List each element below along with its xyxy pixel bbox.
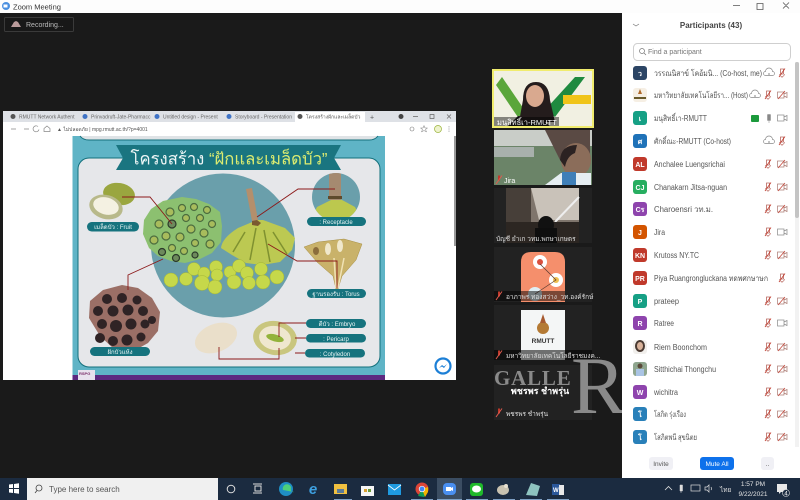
video tile: active speaker: มนุสิทธิ์เา-RMUTT xyxy=(497,117,557,127)
browser tab bar: Prinvadruft-Jate-Pharmacc xyxy=(91,114,151,120)
participant row: prateep xyxy=(654,297,680,306)
participant row: KN xyxy=(635,253,645,260)
participants panel xyxy=(622,13,800,478)
running app underlines xyxy=(334,498,569,500)
browser tab bar xyxy=(3,111,456,122)
participant row: Chanakarn Jitsa-nguan xyxy=(654,183,727,192)
label: embryo xyxy=(306,319,366,328)
participant search box: Find a participant xyxy=(648,49,702,56)
start button xyxy=(9,483,19,494)
participant row: Sitthichai Thongchu xyxy=(654,365,716,374)
cortana and task view xyxy=(227,484,262,493)
mute all button: Mute All xyxy=(705,461,729,468)
participant row xyxy=(633,385,787,399)
video tile: third participant xyxy=(494,188,592,243)
participant row: มนุสิทธิ์เา-RMUTT xyxy=(654,112,707,123)
participants heading xyxy=(633,21,742,30)
white seed xyxy=(190,317,242,359)
participant row: โ xyxy=(637,433,642,442)
fruit seed image xyxy=(86,180,137,223)
participant row: Ratree xyxy=(654,319,674,328)
video tile: named participant: พชรพร ชำพรุ่น xyxy=(506,410,549,418)
dried lotus pod xyxy=(89,285,160,352)
named participant caption: พชรพร ชำพรุ่น xyxy=(511,386,570,397)
clock: 9/22/2021 xyxy=(739,491,768,498)
participant row xyxy=(633,88,787,102)
participant row: wichitra xyxy=(653,388,678,397)
participant row: Anchalee Luengsrichai xyxy=(654,160,725,169)
label: dried pod xyxy=(90,347,150,356)
receptacle image xyxy=(312,173,360,217)
label: dried pod: ฝักบัวแห้ง xyxy=(107,349,133,356)
participant row: โสภิต รุ่งเรือง xyxy=(654,409,686,419)
callout lines xyxy=(122,189,337,359)
more button xyxy=(761,457,774,470)
recording badge xyxy=(4,18,74,32)
participant row xyxy=(633,362,787,376)
clock: 1:57 PM xyxy=(741,481,765,488)
pinned app icons xyxy=(279,478,564,500)
participant row xyxy=(633,430,787,444)
video tile: avatar graphic: อาภาพร ทองสว่าง_วท.องค์รักษ์ xyxy=(506,293,594,301)
video tile: RMUTT logo xyxy=(494,305,600,360)
green lotus seeds xyxy=(164,260,284,294)
participant row xyxy=(633,111,787,125)
taskbar search box: Type here to search xyxy=(49,485,120,494)
participant row: ว xyxy=(638,71,642,78)
participant row: มหาวิทยาลัยเทคโนโลยีรา... (Host) xyxy=(654,90,748,100)
browser tab bar: Untitled design - Present xyxy=(163,114,218,120)
clock xyxy=(739,481,768,498)
poster footer bar xyxy=(72,370,385,380)
label: cotyledon xyxy=(305,349,365,358)
participant row: PR xyxy=(635,276,645,283)
notification icon xyxy=(777,484,790,498)
taskbar search box xyxy=(27,478,218,500)
video tile: third participant: บัญชี ยำเก วทม.พกษาเกษตร xyxy=(496,235,576,243)
central teal circle xyxy=(151,174,295,318)
participant row: ศักดิ์ณะ-RMUTT (Co-host) xyxy=(654,135,731,146)
recording badge: Recording... xyxy=(26,22,64,29)
label: embryo: ดีบัว : Embryo xyxy=(319,320,356,328)
participant row: CJ xyxy=(636,185,645,192)
label: fruit: เมล็ดบัว : Fruit xyxy=(94,222,132,231)
browser scrollbar xyxy=(454,136,456,246)
participant row: Piya Ruangrongluckana ทดพศกษาษก xyxy=(654,274,768,283)
participant row xyxy=(633,225,787,239)
poster title ribbon xyxy=(116,145,341,170)
browser tab bar: RMUTT Network Authent xyxy=(19,114,75,120)
participant row: เ xyxy=(639,116,642,123)
participant row: Krutoss NY.TC xyxy=(654,251,699,260)
system tray xyxy=(665,485,732,494)
participant row xyxy=(633,271,785,285)
poster title ribbon: โครงสร้าง “ฝักและเมล็ดบัว” xyxy=(130,148,328,168)
invite button: Invite xyxy=(653,461,669,468)
browser address bar xyxy=(3,122,456,136)
participant row xyxy=(633,294,787,308)
label: pericarp xyxy=(306,334,366,343)
participant search box xyxy=(634,44,790,60)
video tile: RMUTT logo: RMUTT xyxy=(532,338,554,345)
browser tab bar: + xyxy=(370,114,374,122)
label: cotyledon: : Cotyledon xyxy=(320,352,350,358)
participant row xyxy=(633,134,785,148)
poster inner panel xyxy=(78,158,380,367)
pinned app icons: e xyxy=(309,481,317,498)
poster footer bar: RSPG xyxy=(79,371,90,376)
participant row: วรรณนิสาข์ โคอ้มนิ... (Co-host, me) xyxy=(654,68,762,78)
invite button xyxy=(649,457,673,470)
participant row: W xyxy=(637,390,644,397)
participant row: Charoensri วท.ม. xyxy=(654,205,713,214)
watermark: R xyxy=(571,340,626,431)
pinned app icons: W xyxy=(553,488,559,494)
seed cross-section xyxy=(250,317,300,359)
participant row: Riem Boonchom xyxy=(654,343,707,352)
windows taskbar xyxy=(0,478,800,500)
participant row xyxy=(633,180,787,194)
participants heading: Participants (43) xyxy=(680,21,742,30)
participant row xyxy=(633,248,787,262)
participant row: P xyxy=(638,299,643,306)
label: torus: ฐานรองรับ : Torus xyxy=(312,291,360,298)
video tile: named participant xyxy=(494,365,592,420)
video tile: Jira xyxy=(494,130,592,185)
green lotus pod xyxy=(143,197,222,263)
browser address bar: ▲ ไม่ปลอดภัย | mpg.rmutt.ac.th/?p=4001 xyxy=(57,126,148,133)
video tile: active speaker xyxy=(492,69,594,128)
participant row xyxy=(633,340,787,354)
video tile: Jira: Jira xyxy=(504,178,515,185)
torus cross-section image xyxy=(304,239,362,289)
mute all button xyxy=(700,457,734,470)
participant row xyxy=(633,66,785,80)
window title bar: Zoom Meeting xyxy=(13,2,61,12)
back of lotus pod xyxy=(221,188,295,265)
shared browser window xyxy=(3,111,456,380)
participant row: R xyxy=(637,321,643,328)
participant row xyxy=(633,407,787,421)
notification icon: 4 xyxy=(784,492,788,498)
browser tab bar: Storyboard - Presentation xyxy=(235,114,292,120)
label: receptacle: : Receptacle xyxy=(319,220,353,226)
label: pericarp: : Pericarp xyxy=(323,337,349,343)
label: receptacle xyxy=(307,217,366,226)
participant row: Cร xyxy=(636,207,645,214)
watermark: GALLE xyxy=(494,366,572,390)
participant row xyxy=(633,316,787,330)
messenger chat button xyxy=(436,358,450,374)
watermark xyxy=(494,340,626,431)
video tile: RMUTT logo: มหาวิทยาลัยเทคโนโลยีราชมงค... xyxy=(506,352,600,360)
browser tab bar: โครงสร้างฝักและเมล็ดบัว xyxy=(306,112,361,120)
participant row: AL xyxy=(635,162,645,169)
label: fruit xyxy=(87,222,139,232)
participant row: ศ xyxy=(638,139,643,146)
participant row: Jira xyxy=(654,228,665,237)
panel scrollbar xyxy=(795,62,799,447)
participant row: โสภิตพนี สุขนิตย xyxy=(654,432,697,442)
window title bar xyxy=(0,0,800,13)
more button: .. xyxy=(766,461,769,468)
participant row xyxy=(633,157,787,171)
participant row: J xyxy=(638,230,642,237)
participant row xyxy=(633,202,787,216)
poster: lotus pod and seed structure xyxy=(72,136,385,380)
label: torus xyxy=(307,289,366,298)
participant row: โ xyxy=(637,410,642,419)
video tile: avatar graphic xyxy=(494,247,594,302)
system tray: ไทย xyxy=(719,486,732,494)
